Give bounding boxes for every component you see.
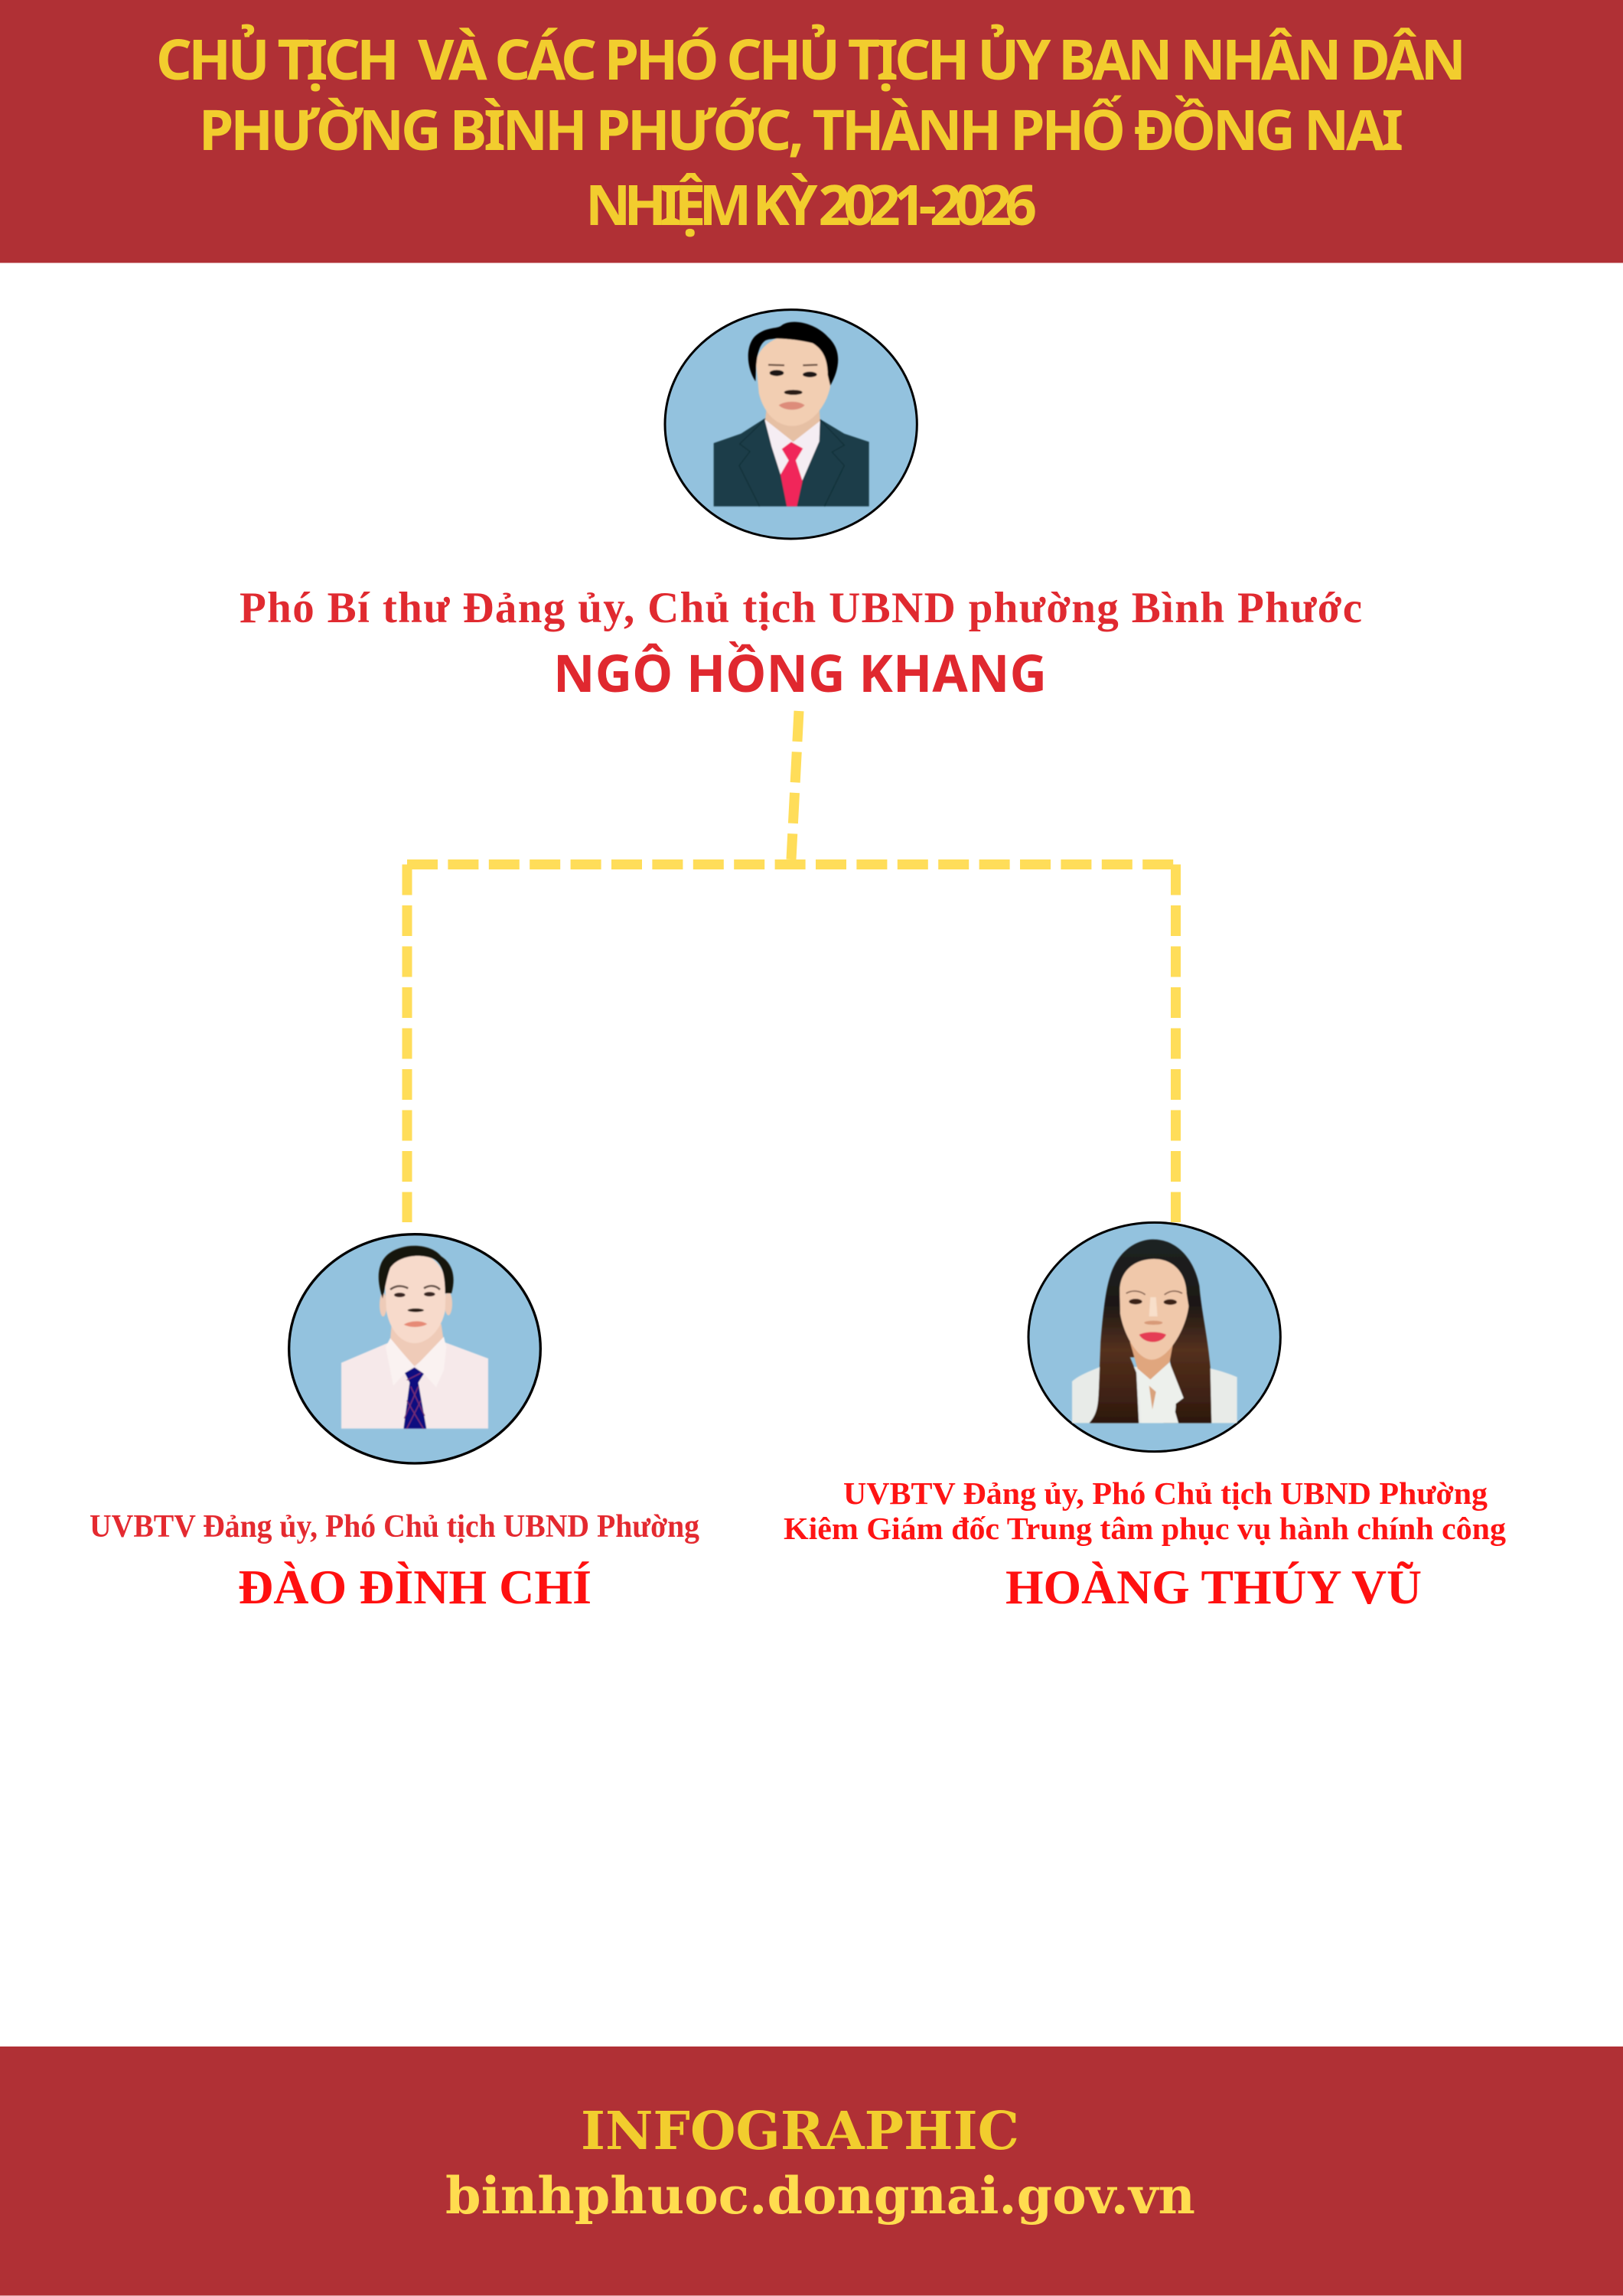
title <box>156 21 1466 242</box>
footer website: binhphuoc.dongnai.gov.vn <box>445 2166 1195 2226</box>
footer label: INFOGRAPHIC <box>581 2101 1019 2162</box>
footer banner <box>0 2047 1623 2296</box>
role: vice chairman Hoàng Thúy Vũ: Kiêm Giám đốc Trung tâm phục vụ hành chính công <box>784 1511 1506 1546</box>
header banner <box>0 0 1623 263</box>
role: vice chairman Hoàng Thúy Vũ: UVBTV Đảng ủy, Phó Chủ tịch UBND Phường <box>843 1476 1488 1511</box>
title: NHIỆM KỲ 2021-2026 <box>585 166 1037 242</box>
portrait: Hoàng Thúy Vũ <box>1028 1222 1280 1452</box>
role: vice chairman Đào Đình Chí <box>90 1509 699 1614</box>
connector: dashed org lines <box>407 711 1175 1222</box>
role: chairman <box>240 584 1362 707</box>
name: Đào Đình Chí: ĐÀO ĐÌNH CHÍ <box>238 1560 592 1614</box>
role: vice chairman Đào Đình Chí: UVBTV Đảng ủy, Phó Chủ tịch UBND Phường <box>90 1509 699 1544</box>
title: CHỦ TỊCH VÀ CÁC PHÓ CHỦ TỊCH ỦY BAN NHÂN DÂN <box>156 21 1466 96</box>
portrait: Ngô Hồng Khang <box>665 310 917 539</box>
role: vice chairman Hoàng Thúy Vũ <box>784 1476 1506 1614</box>
portrait: Đào Đình Chí <box>289 1234 540 1463</box>
role: chairman: Phó Bí thư Đảng ủy, Chủ tịch UBND phường Bình Phước <box>240 584 1362 632</box>
name: chairman: NGÔ HỒNG KHANG <box>553 637 1047 707</box>
name: Hoàng Thúy Vũ: HOÀNG THÚY VŨ <box>1005 1560 1422 1614</box>
title: PHƯỜNG BÌNH PHƯỚC, THÀNH PHỐ ĐỒNG NAI <box>199 91 1403 167</box>
